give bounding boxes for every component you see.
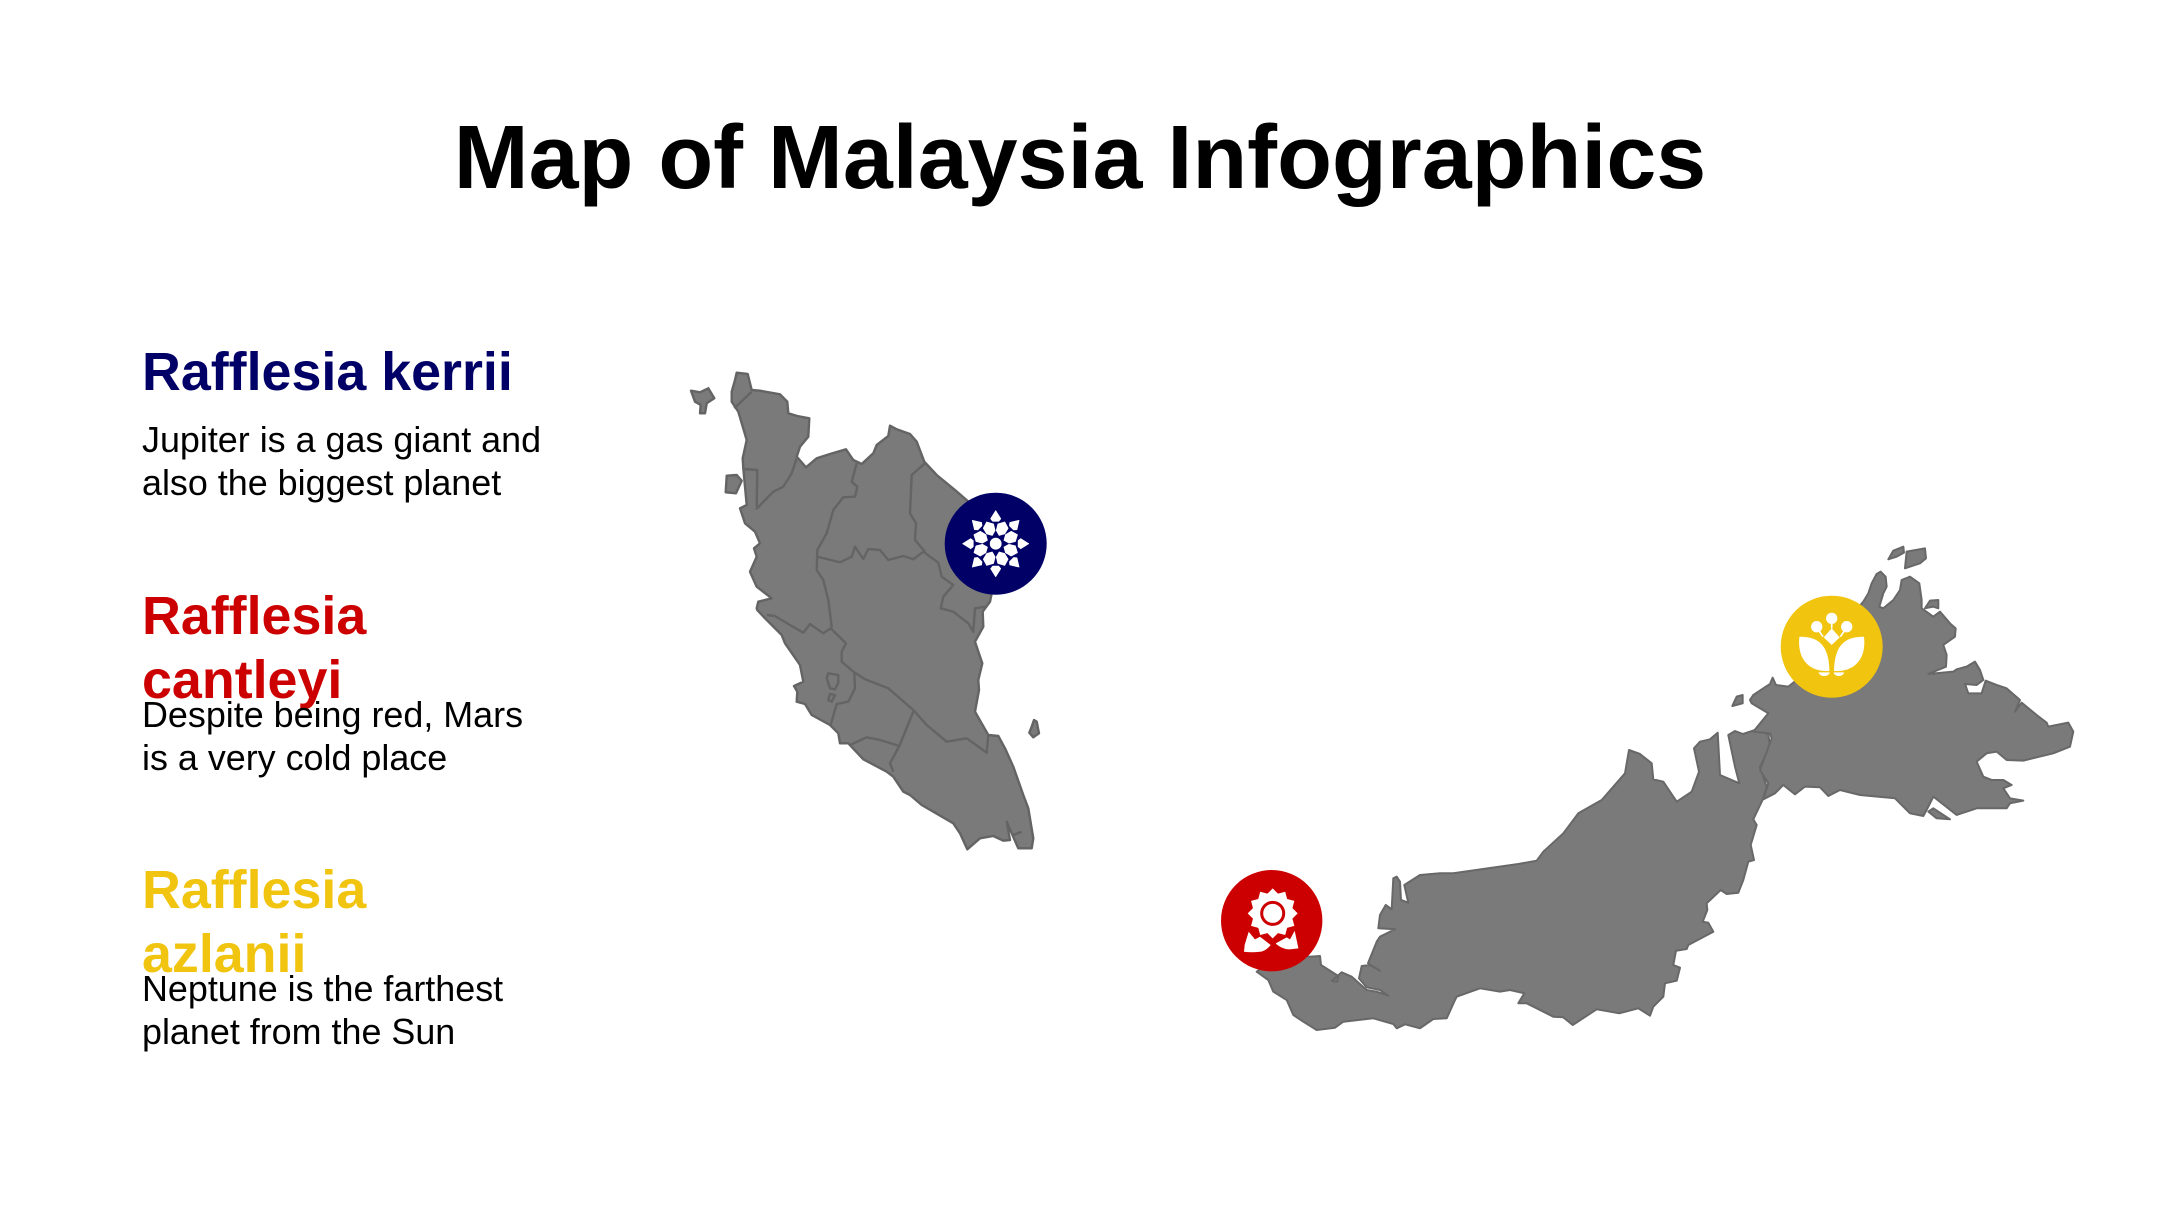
- icon: yellow flower marker: [1781, 596, 1883, 698]
- heading: Rafflesia azlanii: Rafflesia: [142, 860, 366, 920]
- islands: Langkawi, Penang, Tioman: [691, 388, 1039, 737]
- map: Sabah: [1732, 547, 2073, 819]
- icon: navy flower marker: [945, 493, 1047, 595]
- text: Mars description: [142, 695, 523, 778]
- state borders: [734, 392, 1022, 835]
- panel: Rafflesia kerrii: [142, 342, 541, 503]
- heading: Rafflesia kerrii: Rafflesia kerrii: [142, 342, 513, 402]
- text: Jupiter description: [142, 420, 541, 503]
- text: Neptune description: planet from the Sun: [142, 1012, 455, 1052]
- text: Neptune description: Neptune is the farthest: [142, 969, 503, 1009]
- heading: Rafflesia cantleyi: Rafflesia: [142, 586, 366, 646]
- icon: red sunflower marker: [1221, 870, 1322, 971]
- islands: Banggi, Balambangan, Sebatik: [1732, 547, 1950, 819]
- map: Peninsular Malaysia: [691, 373, 1039, 849]
- map: Sarawak: [1257, 730, 1770, 1030]
- text: Mars description: is a very cold place: [142, 738, 447, 778]
- heading: Rafflesia azlanii: [142, 860, 367, 984]
- heading: Rafflesia azlanii: azlanii: [142, 924, 306, 984]
- title: Map of Malaysia Infographics: [454, 108, 1706, 208]
- panel: Rafflesia cantleyi: [142, 586, 523, 778]
- text: Neptune description: [142, 969, 503, 1052]
- text: Mars description: Despite being red, Mars: [142, 695, 523, 735]
- heading: Rafflesia cantleyi: [142, 586, 367, 710]
- text: Jupiter description: Jupiter is a gas giant and: [142, 420, 541, 460]
- heading: Rafflesia cantleyi: cantleyi: [142, 650, 342, 710]
- text: Jupiter description: also the biggest planet: [142, 463, 501, 503]
- panel: Rafflesia azlanii: [142, 860, 503, 1052]
